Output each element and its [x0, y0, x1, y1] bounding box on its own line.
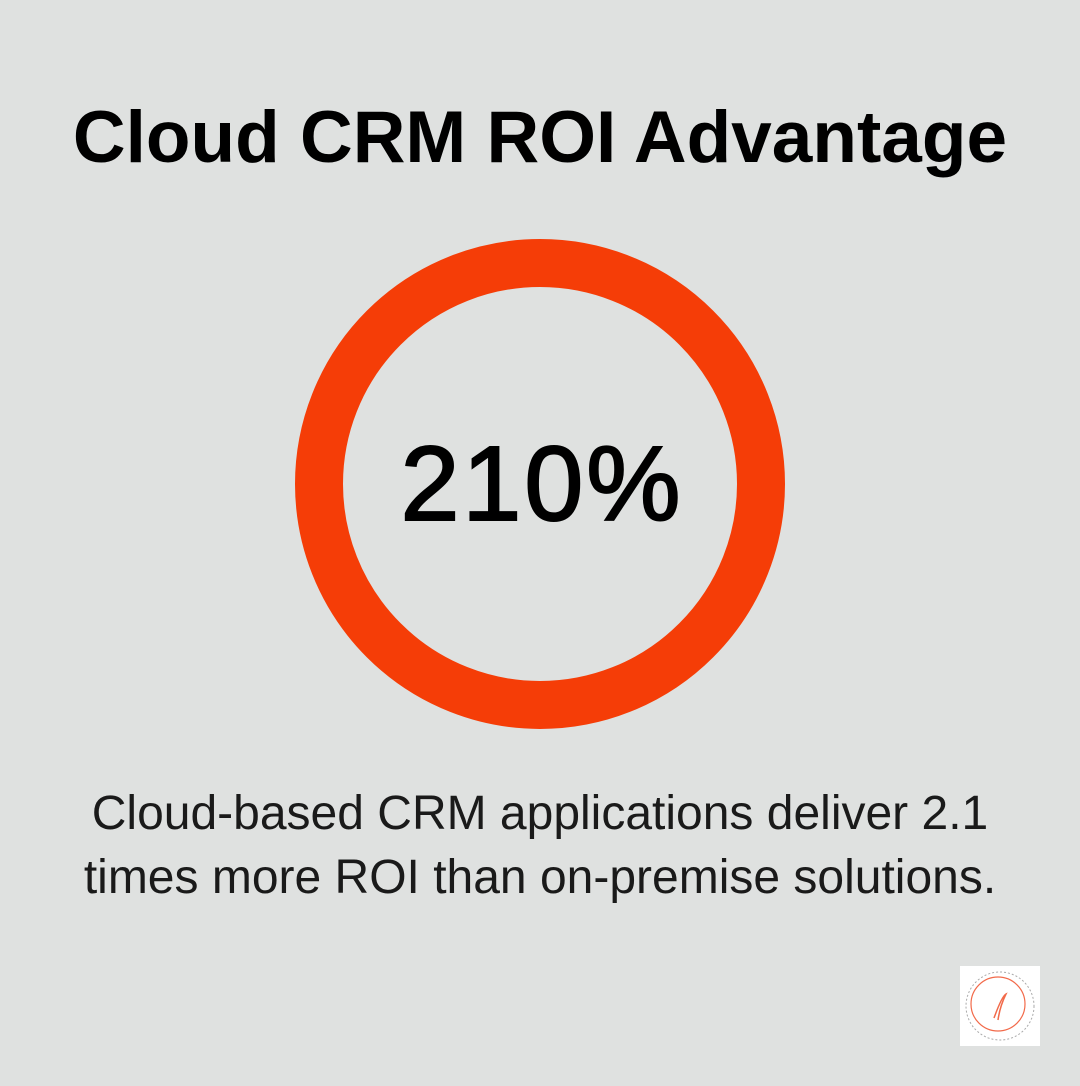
percentage label: 210%: [400, 425, 684, 543]
title: Cloud CRM ROI Advantage: [73, 97, 1007, 178]
description text: [84, 787, 996, 904]
logo: [960, 966, 1040, 1046]
description text: times more ROI than on-premise solutions.: [84, 851, 996, 904]
description text: Cloud-based CRM applications deliver 2.1: [92, 787, 988, 840]
